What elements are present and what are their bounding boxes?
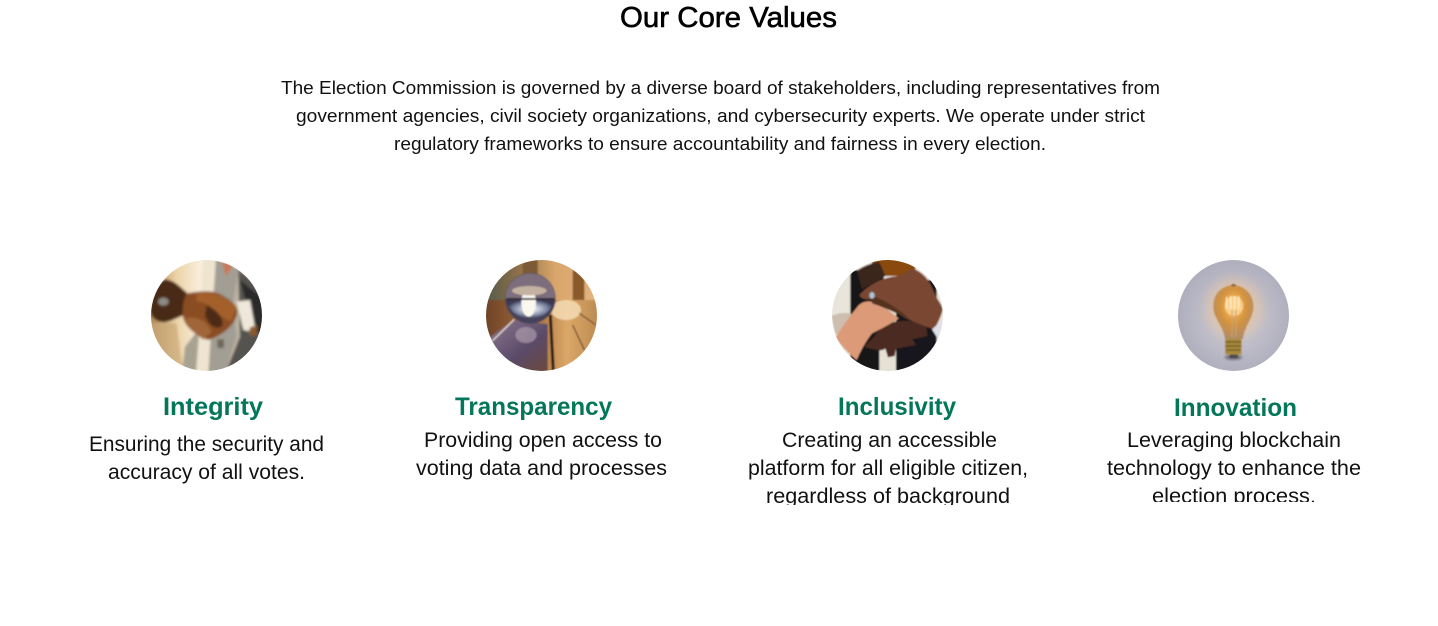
intro paragraph: regulatory frameworks to ensure accountability and fairness in every election. — [394, 134, 1046, 154]
icon: handshake photo — [151, 260, 262, 371]
panel: integrity — [89, 257, 324, 484]
intro paragraph: The Election Commission is governed by a diverse board of stakeholders, including representatives from — [281, 78, 1160, 98]
text: transparency description: voting data and processes — [416, 457, 667, 480]
icon: crystal ball photo — [486, 260, 597, 371]
icon: stacked hands photo — [832, 260, 943, 371]
text: innovation description: technology to enhance the — [1107, 457, 1361, 480]
heading: integrity: Integrity — [163, 393, 263, 421]
text: innovation description: Leveraging blockchain — [1127, 429, 1341, 452]
panel: inclusivity — [748, 257, 1028, 508]
text: transparency description — [416, 429, 667, 480]
text: integrity description: Ensuring the security and — [89, 433, 324, 456]
text: inclusivity description: Creating an accessible — [782, 429, 997, 452]
text: innovation description: election process. — [1152, 485, 1316, 508]
panel: innovation — [1107, 257, 1361, 508]
heading: inclusivity: Inclusivity — [838, 393, 956, 421]
text: integrity description — [89, 433, 324, 484]
heading: innovation: Innovation — [1174, 394, 1297, 422]
intro paragraph — [281, 78, 1160, 154]
text: integrity description: accuracy of all votes. — [108, 461, 305, 484]
text: inclusivity description: regardless of background — [766, 485, 1010, 508]
intro paragraph: government agencies, civil society organizations, and cybersecurity experts. We operate under strict — [296, 106, 1145, 126]
text: transparency description: Providing open access to — [424, 429, 662, 452]
icon: light bulb photo — [1178, 260, 1289, 371]
heading: transparency: Transparency — [455, 393, 612, 421]
text: inclusivity description — [748, 429, 1028, 508]
text: innovation description — [1107, 432, 1360, 502]
text: inclusivity description: platform for all eligible citizen, — [748, 457, 1028, 480]
title: Our Core Values — [620, 2, 837, 34]
panel: transparency — [416, 257, 667, 480]
